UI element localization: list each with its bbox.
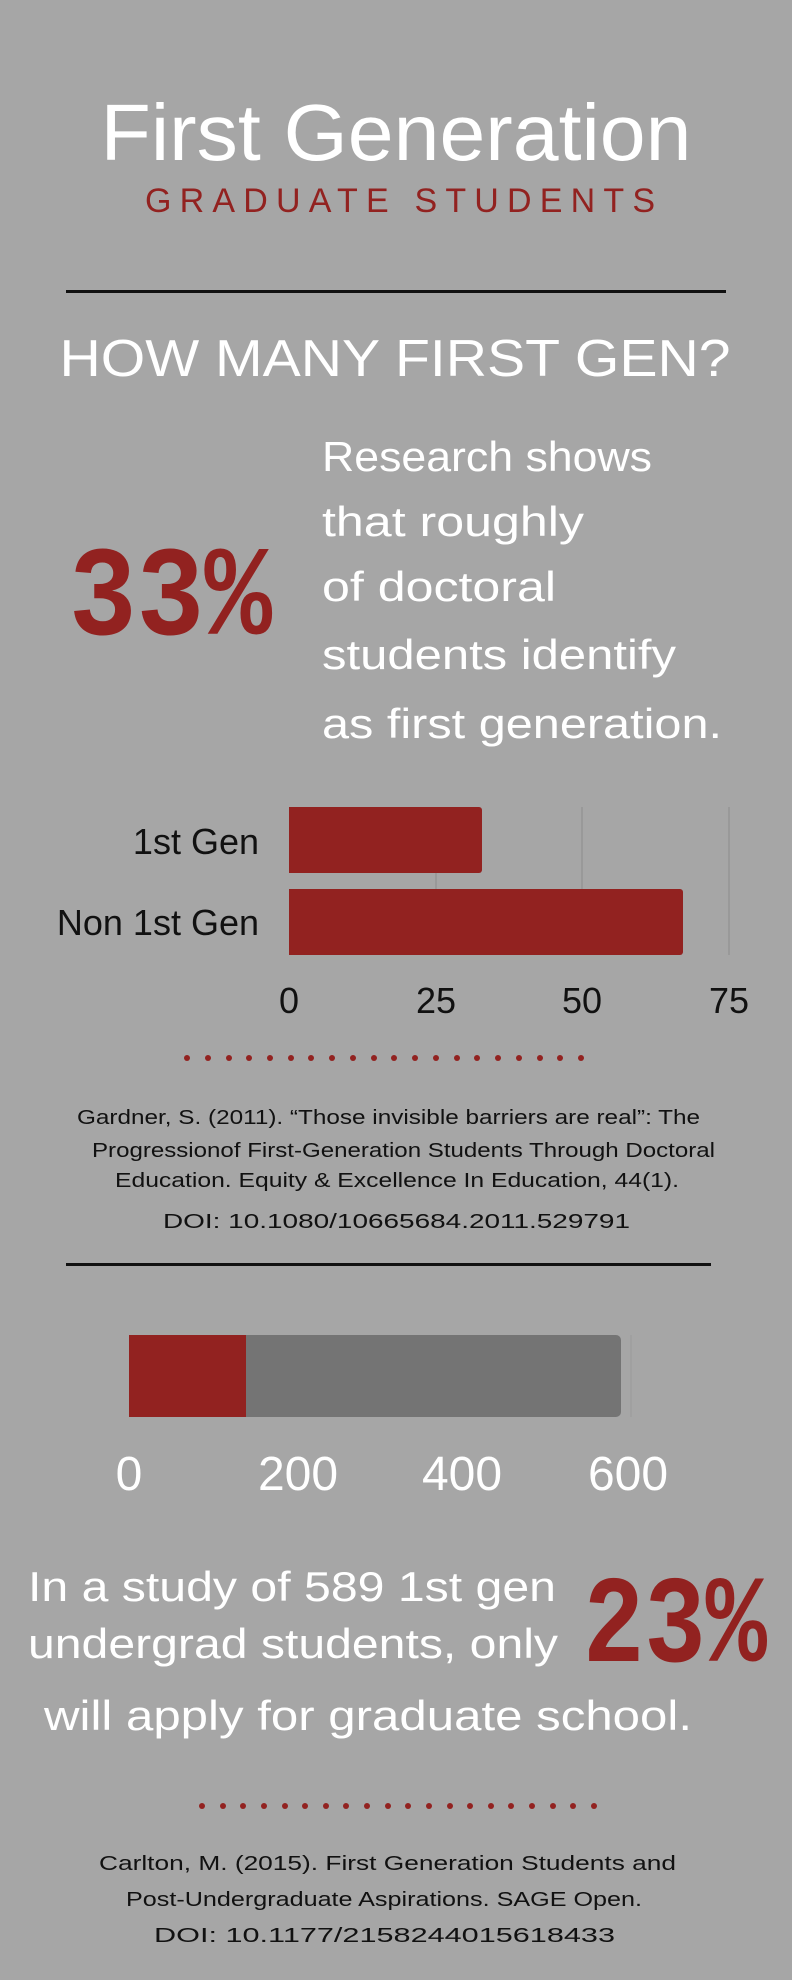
- bar chart: 589 students: 200: [258, 1448, 338, 1501]
- citation 2: Post-Undergraduate Aspirations. SAGE Open.: [126, 1889, 642, 1911]
- dotted divider 1: [184, 1055, 584, 1061]
- bar chart: first gen vs non first gen: 75: [709, 980, 749, 1021]
- citation 1: [77, 1107, 715, 1233]
- text block: study: [28, 1563, 692, 1739]
- bar chart: 589 students: 600: [588, 1448, 668, 1501]
- bar: 1st Gen: [289, 807, 482, 873]
- text block: research: students identify: [322, 631, 676, 678]
- bar: Non 1st Gen: [289, 889, 683, 955]
- citation 2: [99, 1853, 676, 1947]
- bar chart: first gen vs non first gen: 25: [416, 980, 456, 1021]
- citation 1: Progressionof First-Generation Students Through Doctoral: [92, 1140, 715, 1162]
- text block: research: as first generation.: [322, 700, 722, 747]
- bar chart: first gen vs non first gen: 50: [562, 980, 602, 1021]
- bar chart: 589 students: 0: [116, 1448, 142, 1501]
- bar chart: first gen vs non first gen: 0: [279, 980, 299, 1021]
- text block: study: In a study of 589 1st gen: [28, 1563, 556, 1610]
- bar chart: first gen vs non first gen: [57, 807, 749, 1021]
- citation 2: DOI: 10.1177/2158244015618433: [154, 1925, 615, 1947]
- dotted divider 2: [199, 1803, 597, 1809]
- subtitle: GRADUATE STUDENTS: [145, 182, 655, 220]
- bar chart: first gen vs non first gen: 1st Gen: [133, 821, 259, 862]
- citation 1: DOI: 10.1080/10665684.2011.529791: [163, 1211, 630, 1233]
- text block: research: that roughly: [322, 498, 584, 545]
- big stat 33%: 33%: [69, 528, 272, 673]
- text block: study: undergrad students, only: [28, 1620, 558, 1667]
- citation 1: Gardner, S. (2011). “Those invisible barriers are real”: The: [77, 1107, 700, 1129]
- bar chart: first gen vs non first gen: Non 1st Gen: [57, 902, 259, 943]
- bar chart: 589 students: [116, 1335, 668, 1501]
- citation 2: Carlton, M. (2015). First Generation Students and: [99, 1853, 676, 1875]
- section heading: HOW MANY FIRST GEN?: [60, 330, 730, 388]
- title: First Generation: [100, 88, 692, 177]
- text block: research: [322, 433, 722, 747]
- citation 1: Education. Equity & Excellence In Education, 44(1).: [115, 1170, 679, 1192]
- text block: research: Research shows: [322, 433, 652, 480]
- text block: study: will apply for graduate school.: [43, 1692, 692, 1739]
- text block: research: of doctoral: [322, 563, 556, 610]
- bar chart: 589 students: 400: [422, 1448, 502, 1501]
